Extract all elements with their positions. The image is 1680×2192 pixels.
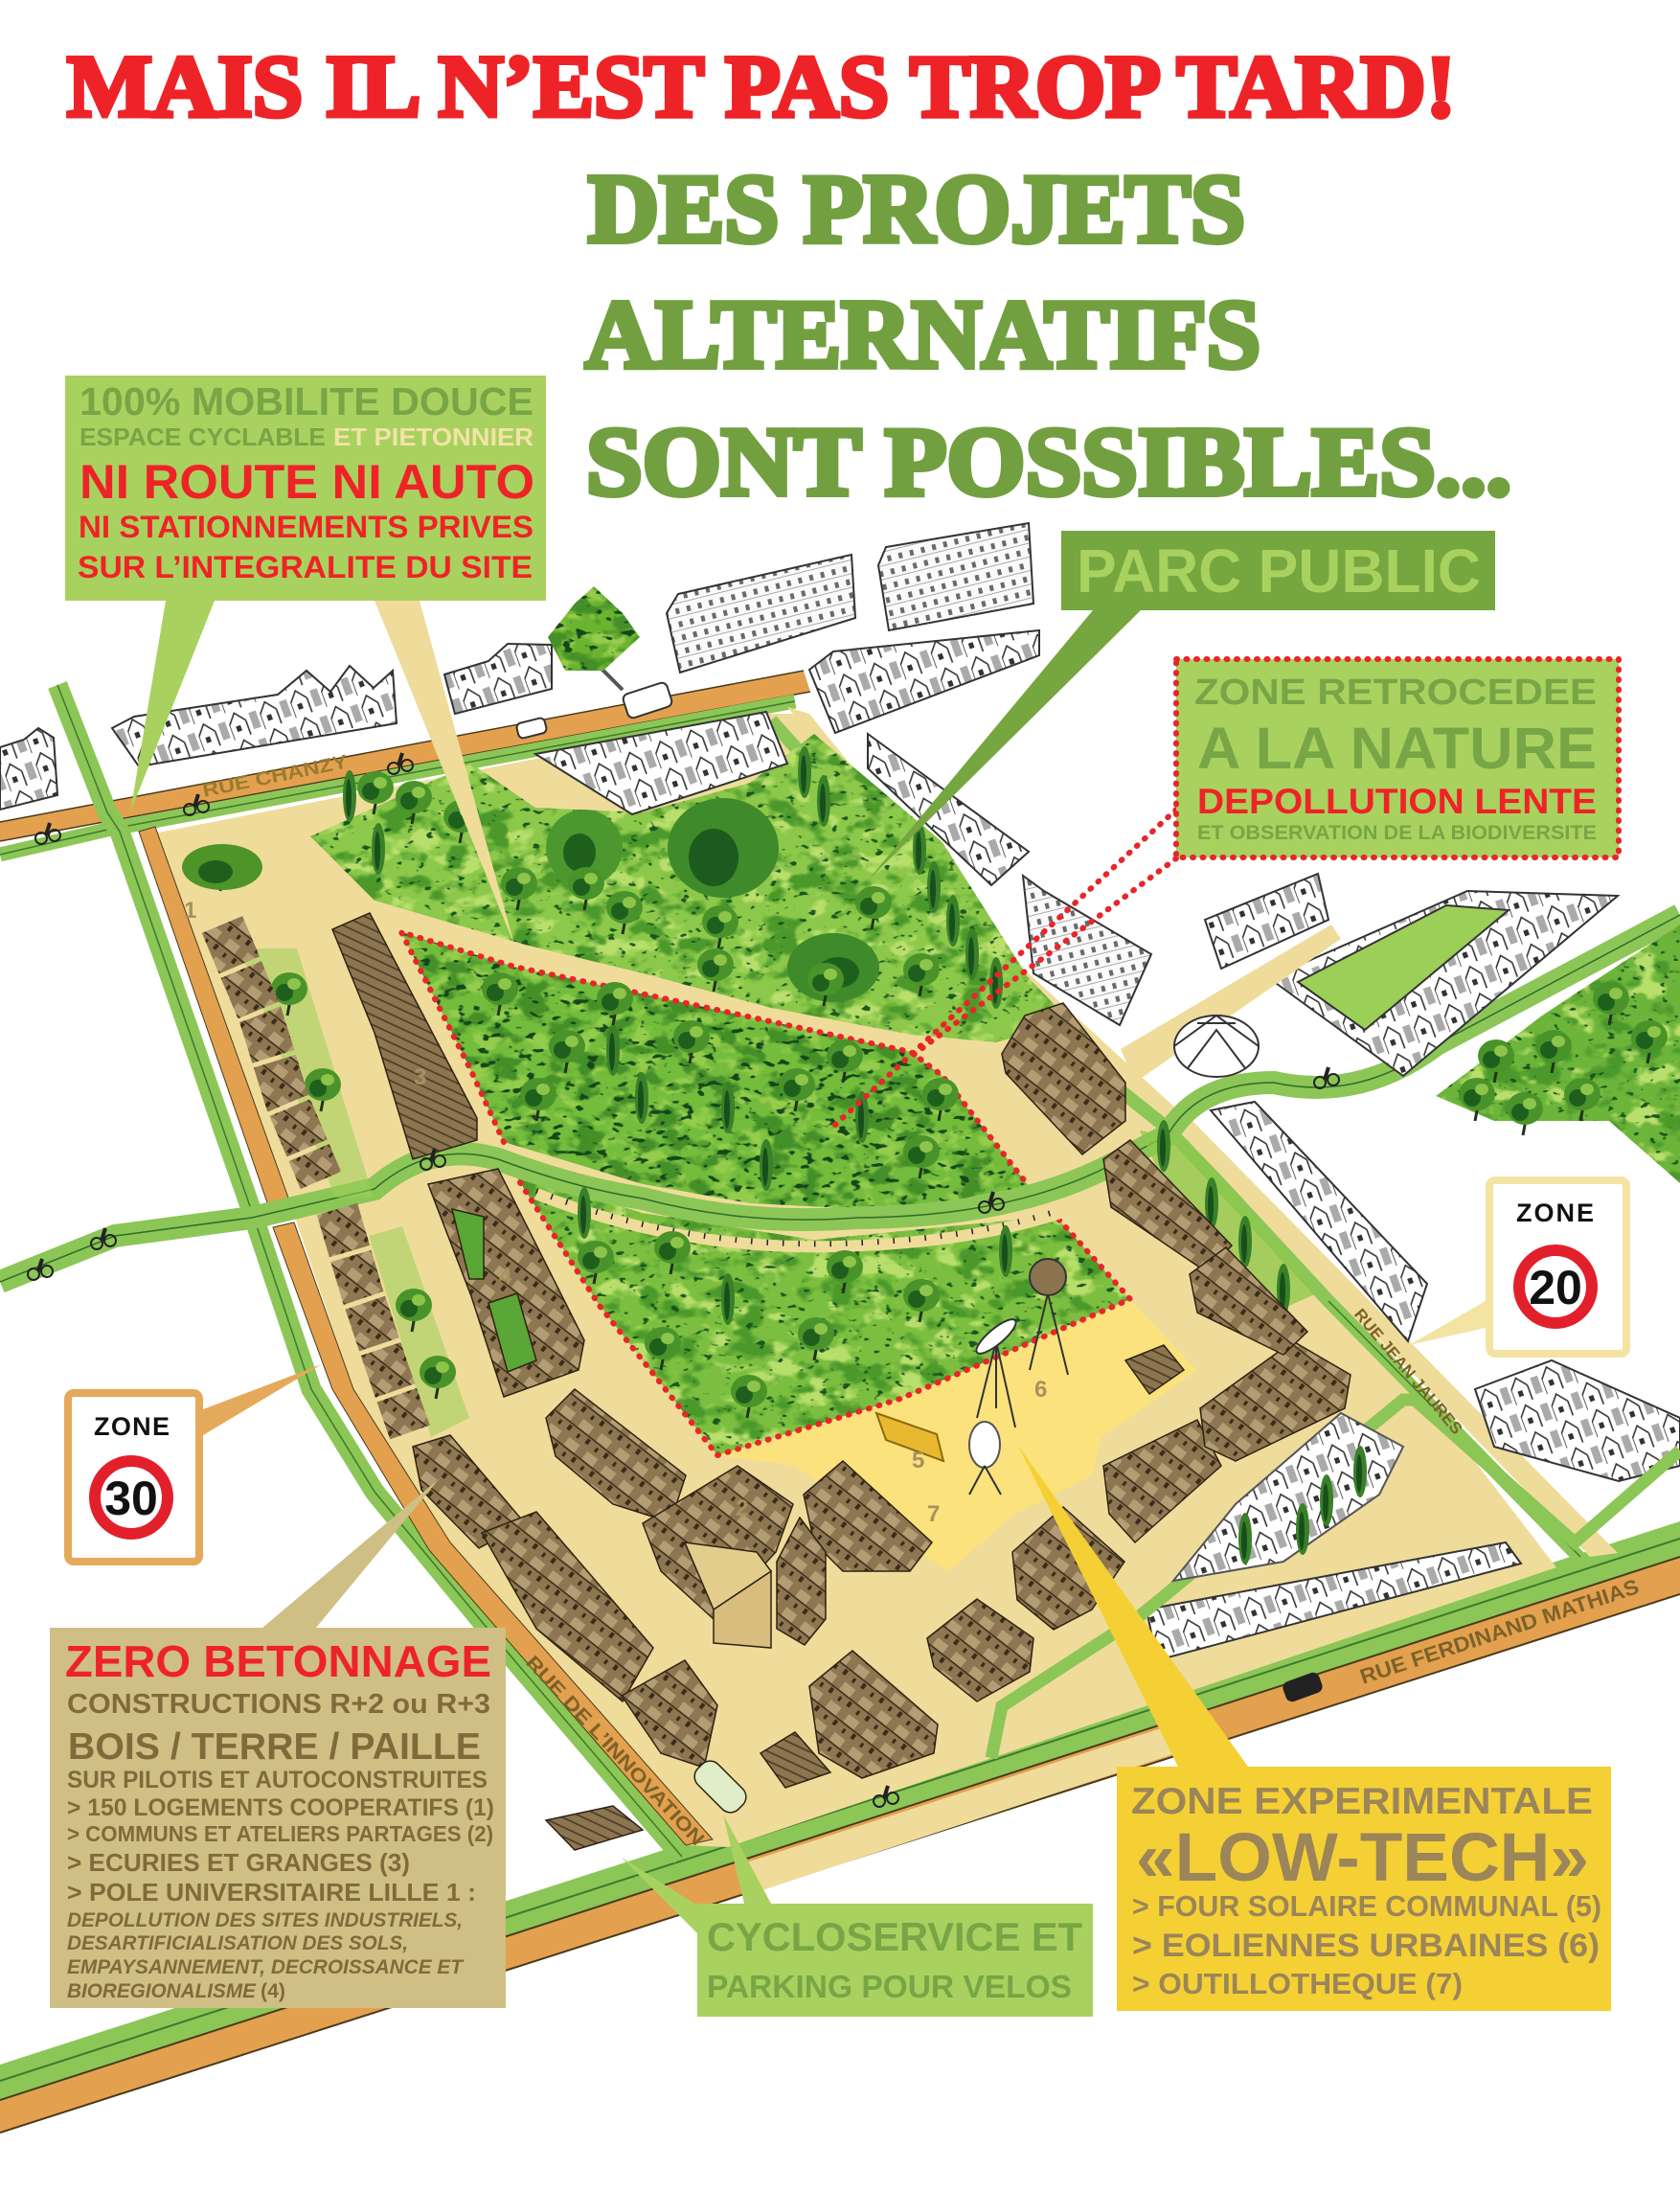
heading: ZONE EXPERIMENTALE [1131,1781,1593,1822]
map numbers: 2 [736,1496,748,1521]
panel: cycloservice: PARKING POUR VELOS [707,1969,1072,2004]
map numbers: 5 [912,1448,924,1473]
trees: park public [182,746,1003,1009]
list item 2: > COMMUNS ET ATELIERS PARTAGES (2) [67,1821,493,1846]
road: rue Ferdinand Mathias band [0,1521,1680,2133]
title: MAIS IL N’EST PAS TROP TARD! [67,37,1456,135]
line: et pietonnier: ET PIETONNIER [333,422,534,451]
list item 4: > POLE UNIVERSITAIRE LILLE 1 : [67,1878,476,1907]
small sheds and bike parking [546,1345,1184,1850]
subtitle: SONT POSSIBLES... [586,408,1511,516]
line: stationnements: NI STATIONNEMENTS PRIVES [79,510,534,544]
heading: ZONE RETROCEDEE [1194,673,1597,713]
street label: rue Chanzy: RUE CHANZY [201,751,351,802]
italic details [67,1909,465,2002]
line: constructions: CONSTRUCTIONS R+2 ou R+3 [67,1689,490,1720]
arrow: walkway [375,601,514,945]
tower and staircase [685,1518,826,1648]
map numbers: 6 [1034,1377,1047,1403]
big label: «LOW-TECH» [1136,1820,1589,1896]
line: ni route ni auto: NI ROUTE NI AUTO [79,455,534,509]
panel: zero betonnage [50,1628,506,2008]
arrow: low-tech [1018,1446,1248,1767]
list item 7: > OUTILLOTHEQUE (7) [1132,1967,1463,2000]
line: observation: ET OBSERVATION DE LA BIODIVERSITE [1197,822,1597,844]
arrow: zone 20 [1409,1301,1486,1345]
panel: cycloservice [697,1904,1093,2017]
list item 1: > 150 LOGEMENTS COOPERATIFS (1) [67,1794,494,1821]
map numbers: 1 [184,898,196,924]
panel: zone low-tech [1117,1767,1611,2011]
sign: zone 20 [1489,1180,1626,1354]
zone retrocedee: south wild area [514,1174,1130,1455]
line: espace cyclable: ESPACE CYCLABLE [79,422,326,451]
map: illustrated site plan [0,523,1680,2133]
south-east block with lanes and white houses [991,1400,1680,1758]
sign: zone 30: ZONE [94,1412,170,1441]
panel: zone retrocedee [1176,659,1619,857]
terrace housing with garden [1121,891,1618,1083]
road: rue Chanzy band [0,671,810,855]
italic details: DEPOLLUTION DES SITES INDUSTRIELS, [67,1909,463,1931]
panel: cycloservice: CYCLOSERVICE ET [707,1914,1082,1959]
line: integralite: SUR L’INTEGRALITE DU SITE [78,550,533,584]
line: a la nature: A LA NATURE [1197,716,1597,781]
road: west bike lane and boulevard [57,685,713,1857]
italic details: (4) [261,1980,285,2002]
line: pilotis: SUR PILOTIS ET AUTOCONSTRUITES [67,1767,488,1793]
map numbers: 3 [414,1064,426,1090]
map numbers: 4 [499,1264,512,1290]
red dotted boundaries of the wild areas [401,932,1130,1455]
arrow: cycloservice to shelter [622,1858,699,1935]
map vehicles and cyclists [28,681,1339,1807]
brown buildings: south and east blocks [413,1003,1351,1778]
arrow: mobilite to lane [130,601,215,812]
sign: zone 30: 30 [104,1472,158,1525]
arrow: zone retrocedee dotted [835,810,1176,1125]
list item 3: > ECURIES ET GRANGES (3) [67,1848,410,1877]
sign: zone 20: ZONE [1516,1199,1594,1227]
zone retrocedee: central wild area [401,932,1029,1211]
line: materials: BOIS / TERRE / PAILLE [68,1726,481,1768]
arrow: cycloservice to parking [723,1815,771,1904]
arrow: zero betonnage [262,1478,440,1628]
sign: zone 20: 20 [1529,1261,1582,1314]
geodesic dome [1174,1016,1259,1077]
trees: zone retrocedee [482,972,1012,1418]
tree near rue Chanzy [548,586,640,690]
italic details: DESARTIFICIALISATION DES SOLS, [67,1932,408,1954]
zone low-tech yellow square [718,1301,1197,1571]
italic details: EMPAYSANNEMENT, DECROISSANCE ET [67,1956,465,1978]
trees: east strip [239,948,1317,1437]
brown buildings: long barn and courtyard building [332,913,584,1397]
heading: 100% MOBILITE DOUCE [79,379,534,423]
line: depollution lente: DEPOLLUTION LENTE [1197,782,1597,821]
arrow: zone 30 [203,1364,322,1435]
low-tech equipment: solar panel and wind turbines [876,1259,1068,1495]
sign: zone 30 [68,1393,199,1562]
subtitle: ALTERNATIFS [585,281,1260,389]
heading: ZERO BETONNAGE [65,1636,491,1686]
street label: rue Ferdinand Mathias: RUE FERDINAND MATHIAS [1357,1574,1642,1689]
sketched grey buildings: north side [0,523,1328,1025]
arrow: parc public [868,610,1141,880]
list item 5: > FOUR SOLAIRE COMMUNAL (5) [1132,1889,1601,1923]
subtitle [585,155,1511,516]
brown houses: west rows (logements) [222,925,410,1432]
panel: mobilite douce [65,376,546,601]
map numbers: 7 [927,1501,940,1527]
central bike path with fence [0,915,1680,1282]
road: east lane rue Jean Jaures [771,707,1618,1564]
park public green area [310,734,1072,1042]
subtitle: DES PROJETS [588,155,1245,263]
list item 6: > EOLIENNES URBAINES (6) [1132,1928,1600,1964]
street label: rue Jean Jaures: RUE JEAN JAURES [1351,1305,1466,1438]
trees: right edge block [1436,925,1680,1183]
sketched grey buildings: east and south [1146,1102,1680,1660]
panel: parc public: PARC PUBLIC [1077,537,1481,605]
map numbers [184,898,1047,1527]
site ground [144,714,1556,1847]
street label: rue de l'Innovation: RUE DE L’INNOVATION [521,1652,708,1850]
italic details: BIOREGIONALISME [67,1980,257,2002]
